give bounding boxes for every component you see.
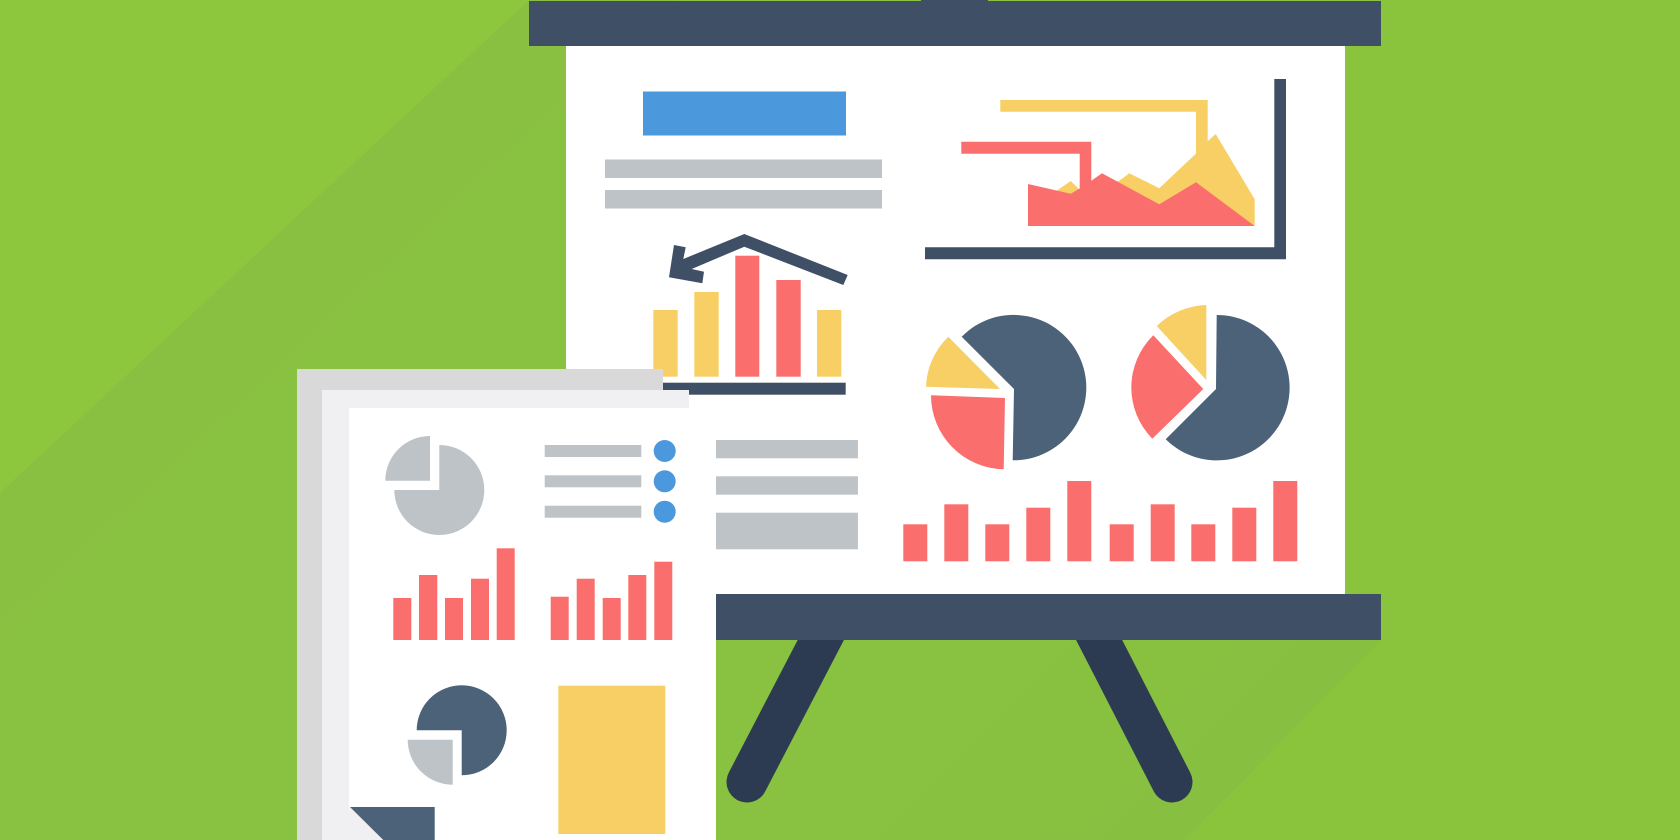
back sheet [297, 369, 663, 840]
easel leg: left [747, 630, 826, 782]
bar chart with trend arrow [640, 234, 848, 395]
area chart [925, 79, 1286, 259]
text blocks on board, left of report edge [700, 440, 858, 549]
front sheet with folded corner [349, 408, 716, 840]
report bar chart: left [393, 548, 515, 640]
bars [653, 256, 841, 377]
pie chart: right [1131, 305, 1290, 460]
top mounting knob [921, 0, 988, 2]
chart baseline [640, 383, 846, 395]
yellow area series [1028, 134, 1255, 226]
navy pie chart [408, 685, 507, 785]
list lines [545, 445, 641, 518]
small gray pie chart [385, 436, 484, 535]
red bar chart on board [903, 481, 1297, 561]
pie chart: left [926, 315, 1086, 469]
report bar chart: right [551, 562, 672, 640]
red legend connector [961, 142, 1091, 190]
bottom bar of the board [529, 594, 1381, 640]
arrow: trend pointing left [669, 234, 848, 285]
text lines under heading [605, 160, 882, 208]
yellow image block [558, 686, 665, 834]
list bullets [654, 440, 676, 523]
middle sheet [322, 390, 689, 840]
report document stack [297, 369, 716, 840]
fold of front sheet [350, 807, 435, 840]
yellow legend connector [1000, 100, 1208, 160]
heading block: blue [643, 92, 846, 136]
easel leg: right [1094, 630, 1172, 782]
red area series [1028, 173, 1255, 226]
projection screen [566, 46, 1345, 594]
chart axes [925, 79, 1286, 259]
top bar of the board [529, 1, 1381, 46]
